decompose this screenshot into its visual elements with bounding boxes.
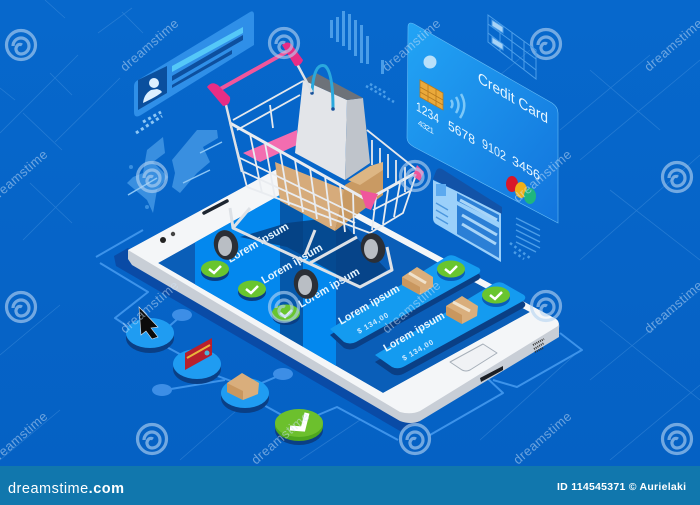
card chip [420,80,443,110]
footer bar [0,466,700,505]
watermark text: dreamstime [117,278,181,336]
dot pattern [366,84,394,102]
side text lines [516,218,540,252]
node dots [152,368,293,396]
step 1: cursor [126,307,174,353]
screen list labels: Lorem ipsum [225,221,291,266]
watermark text: dreamstime [248,409,312,467]
step 2: payment card [173,338,221,384]
card number: 4321 [418,118,434,137]
card number: 3456 [512,152,540,184]
dot pattern [510,243,530,259]
cart shadow [240,217,387,287]
node dot [172,309,192,321]
card dot [424,56,436,68]
screen list labels [225,221,362,311]
parcel on card 2 [446,296,478,324]
home button [450,344,497,371]
bar chart [330,11,384,74]
speaker and camera [204,201,227,213]
charging port [480,366,503,382]
watermark text: dreamstime [379,278,443,336]
footer logo: dreamstime.com [8,481,124,497]
phone screen [158,195,530,393]
order card 2: Lorem ipsum [381,310,447,355]
world map [127,130,222,213]
order card 1: $ 134,00 [355,310,391,336]
card logo [506,176,536,204]
speaker grille [533,339,544,352]
cart back wires [233,81,417,192]
watermark text: dreamstime [510,409,574,467]
screen check badges [201,260,300,325]
screen list labels: Lorem ipsum [259,242,325,287]
card number: 1234 [416,98,439,127]
credit card [407,23,558,223]
circuit lines [96,230,582,440]
shopping cart [207,42,424,302]
card number: 5678 [448,117,475,148]
cart grips [207,83,230,106]
cart handle [215,50,290,92]
order card 2 [375,282,525,375]
cart front wires [230,123,417,234]
parcel on card 1 [402,267,433,295]
order card 1: Lorem ipsum [336,283,402,328]
step 3: parcel [221,373,269,413]
calendar [488,15,536,79]
smartphone [128,169,559,423]
image credit: ID 114545371 © Aurielaki [557,481,686,493]
phone shadow [114,248,420,431]
order card 2: $ 134,00 [400,337,436,363]
order card 1 [330,255,480,350]
pink seat [243,130,297,162]
cart chassis [230,208,392,287]
step 4: confirmation [275,409,323,445]
contactless [451,94,464,118]
step nodes [126,307,323,445]
card number [416,98,540,184]
large cardboard box [275,162,345,231]
watermark text: dreamstime [379,16,443,74]
cart wheels [211,227,241,263]
card number: 9102 [482,135,506,164]
watermark swirls over art [138,28,560,454]
card title: Credit Card [478,69,548,128]
app window [433,168,502,262]
shopping bag [295,66,370,180]
profile panel [134,11,254,133]
watermark text: dreamstime [510,147,574,205]
screen list labels: Lorem ipsum [296,266,362,311]
watermark text: dreamstime [117,16,181,74]
